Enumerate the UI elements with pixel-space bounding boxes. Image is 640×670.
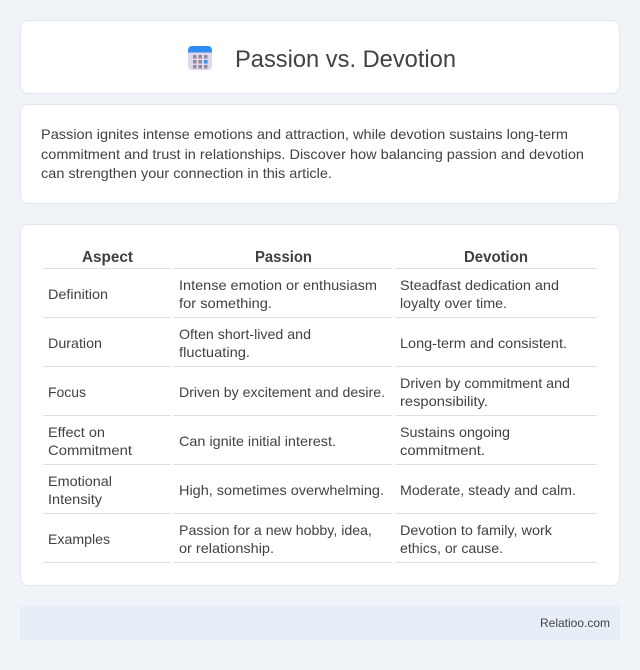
row: effect on commitment: commitment.	[400, 442, 485, 458]
intro text	[41, 126, 584, 181]
row: examples: Passion for a new hobby, idea,	[179, 522, 372, 538]
row: focus: responsibility.	[400, 393, 488, 409]
panel: introduction	[20, 104, 620, 204]
row: examples: Examples	[48, 531, 110, 547]
row: duration	[48, 326, 567, 360]
row: emotional intensity: Intensity	[48, 491, 102, 507]
row: effect on commitment: Effect on	[48, 424, 105, 440]
row: examples	[48, 522, 553, 556]
title: Passion vs. Devotion	[235, 46, 456, 73]
row: focus	[48, 375, 570, 409]
footer bar	[20, 606, 620, 640]
row: definition: Definition	[48, 286, 108, 302]
row: focus: Driven by excitement and desire.	[179, 384, 385, 400]
row: effect on commitment: Can ignite initial interest.	[179, 433, 336, 449]
row: examples: or relationship.	[179, 540, 274, 556]
row: emotional intensity: Emotional	[48, 473, 112, 489]
footer credit: Relatioo.com	[540, 616, 610, 630]
row: effect on commitment	[48, 424, 510, 458]
icon: calendar	[188, 46, 212, 70]
table header: Aspect	[82, 249, 133, 266]
row: duration: fluctuating.	[179, 344, 250, 360]
row: duration: Duration	[48, 335, 102, 351]
row: focus: Focus	[48, 384, 86, 400]
row: focus: Driven by commitment and	[400, 375, 570, 391]
intro text: Passion ignites intense emotions and attraction, while devotion sustains long-term	[41, 126, 568, 142]
row: effect on commitment: Commitment	[48, 442, 132, 458]
panel: title card	[20, 20, 620, 94]
table header: Devotion	[464, 249, 528, 266]
row: duration: Often short-lived and	[179, 326, 311, 342]
panel: comparison table	[20, 224, 620, 586]
row: definition: Intense emotion or enthusiasm	[179, 277, 377, 293]
row: duration: Long-term and consistent.	[400, 335, 567, 351]
intro text: commitment and trust in relationships. Discover how balancing passion and devotion	[41, 146, 584, 162]
intro text: can strengthen your connection in this article.	[41, 165, 332, 181]
row: emotional intensity	[48, 473, 576, 507]
row: definition	[48, 277, 559, 311]
row: examples: ethics, or cause.	[400, 540, 503, 556]
table header: Passion	[255, 249, 312, 266]
row: definition: Steadfast dedication and	[400, 277, 559, 293]
row: definition: loyalty over time.	[400, 295, 507, 311]
row: definition: for something.	[179, 295, 272, 311]
row: emotional intensity: High, sometimes overwhelming.	[179, 482, 384, 498]
row: examples: Devotion to family, work	[400, 522, 553, 538]
table header	[82, 249, 528, 266]
row: emotional intensity: Moderate, steady and calm.	[400, 482, 576, 498]
row: effect on commitment: Sustains ongoing	[400, 424, 510, 440]
